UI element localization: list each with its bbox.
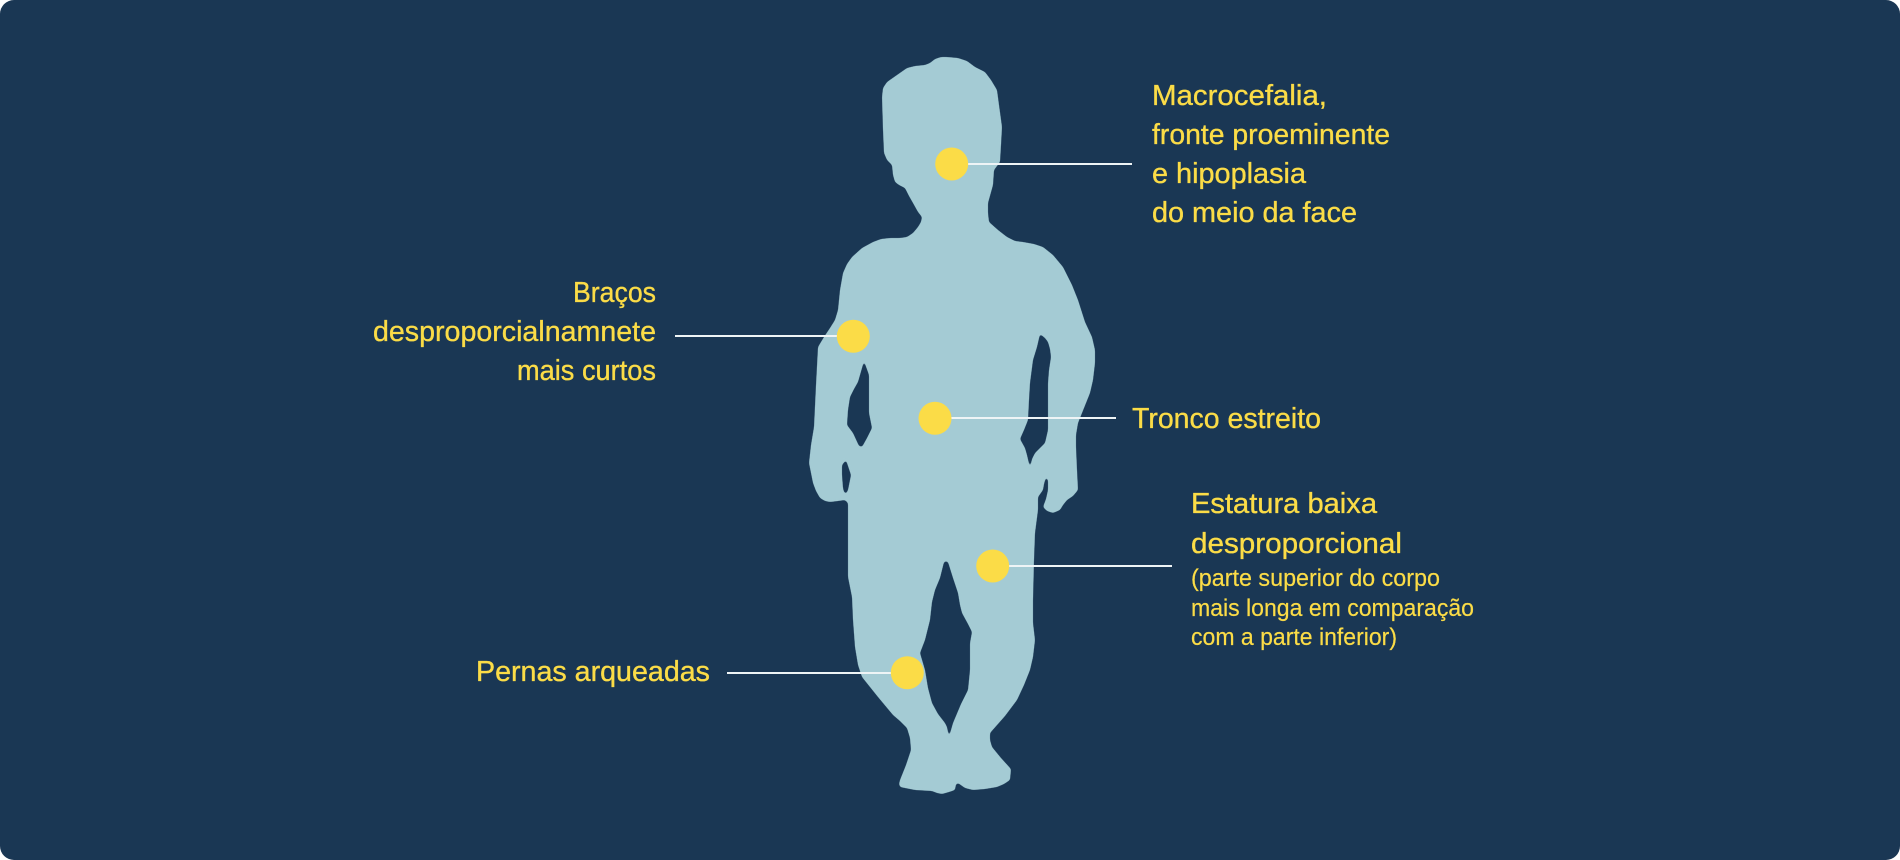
leader line: torso bbox=[950, 417, 1116, 419]
label: estatura: com a parte inferior) bbox=[1191, 624, 1397, 651]
label: braços bbox=[373, 277, 656, 387]
marker dot: knee bbox=[891, 656, 924, 689]
label: macrocefalia: fronte proeminente bbox=[1152, 119, 1390, 151]
label: estatura bbox=[1191, 488, 1474, 651]
label: tronco: Tronco estreito bbox=[1132, 403, 1321, 435]
label: estatura: mais longa em comparação bbox=[1191, 595, 1474, 622]
marker dot: torso bbox=[918, 402, 952, 435]
child silhouette bbox=[809, 57, 1095, 794]
label: macrocefalia: e hipoplasia bbox=[1152, 158, 1307, 190]
marker dot: arm bbox=[837, 320, 870, 353]
marker dot: hip bbox=[976, 550, 1009, 582]
label: pernas: Pernas arqueadas bbox=[476, 656, 710, 688]
label: braços: Braços bbox=[573, 277, 656, 309]
label: braços: mais curtos bbox=[517, 355, 656, 387]
label: macrocefalia: Macrocefalia, bbox=[1152, 80, 1327, 112]
label: braços: desproporcialnamnete bbox=[373, 316, 656, 348]
label: estatura: (parte superior do corpo bbox=[1191, 565, 1440, 592]
leader line: arm bbox=[675, 335, 840, 337]
label: macrocefalia bbox=[1152, 80, 1390, 229]
label: macrocefalia: do meio da face bbox=[1152, 197, 1357, 229]
marker dot: face bbox=[935, 148, 968, 180]
leader line: face bbox=[966, 163, 1132, 165]
label: estatura: Estatura baixa bbox=[1191, 488, 1378, 520]
label: estatura: desproporcional bbox=[1191, 528, 1402, 560]
leader line: knee bbox=[727, 672, 894, 674]
leader line: hip bbox=[1008, 565, 1172, 567]
